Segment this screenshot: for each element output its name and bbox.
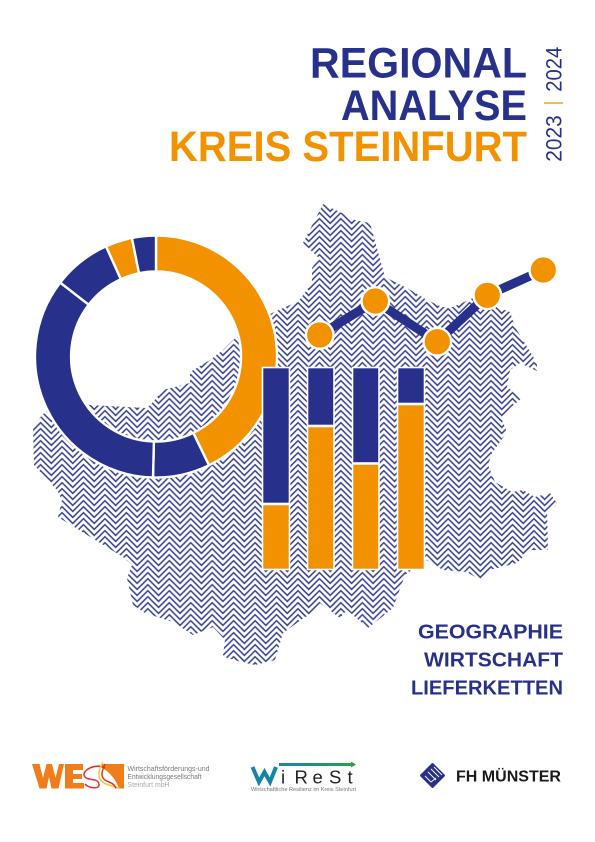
stacked bar chart bbox=[262, 368, 424, 570]
title: ANALYSE bbox=[341, 82, 527, 130]
logo: WiReSt: t bbox=[348, 766, 353, 788]
logo: WESt bbox=[32, 762, 210, 789]
year label: 2023 bbox=[542, 115, 567, 162]
logo: WiReSt bbox=[251, 762, 356, 793]
donut segment: large navy bbox=[35, 283, 154, 478]
title: KREIS STEINFURT bbox=[169, 123, 527, 171]
donut segment: large orange bbox=[156, 235, 277, 465]
logo: WiReSt: S bbox=[329, 766, 341, 788]
logo: WiReSt: i bbox=[281, 766, 285, 788]
logo text: Wirtschaftsförderungs-und bbox=[128, 764, 210, 773]
topic list bbox=[411, 620, 563, 700]
logo text: Entwicklungsgesellschaft bbox=[128, 772, 202, 781]
bar 2 bbox=[308, 368, 334, 570]
logo: WiReSt: e bbox=[312, 766, 323, 788]
bar 4 bbox=[398, 368, 424, 570]
logo: WiReSt: Wirtschaftliche Resilienz im Kreis Steinfurt bbox=[251, 787, 356, 793]
logo text: Steinfurt mbH bbox=[128, 780, 170, 789]
donut segment: small navy bottom bbox=[153, 433, 209, 478]
bar 3 bbox=[352, 368, 379, 570]
donut segment: small orange bbox=[106, 238, 139, 279]
title bbox=[169, 40, 527, 171]
donut segment: small navy top bbox=[132, 236, 156, 273]
line chart bbox=[306, 256, 557, 356]
topic list: GEOGRAPHIE bbox=[418, 620, 563, 644]
topic list: LIEFERKETTEN bbox=[411, 676, 563, 700]
title: REGIONAL bbox=[310, 40, 527, 88]
year label: 2024 bbox=[542, 47, 567, 92]
map: Kreis Steinfurt bbox=[33, 204, 558, 665]
topic list: WIRTSCHAFT bbox=[424, 648, 563, 672]
bar 1 bbox=[262, 368, 290, 570]
logo: FH Münster: FH MÜNSTER bbox=[456, 766, 561, 786]
donut chart bbox=[35, 235, 277, 478]
logo: WiReSt: R bbox=[294, 766, 308, 788]
year label bbox=[542, 47, 567, 162]
donut segment: navy upper left bbox=[60, 246, 121, 305]
logo: FH Münster bbox=[421, 764, 561, 787]
logo text bbox=[128, 764, 210, 789]
